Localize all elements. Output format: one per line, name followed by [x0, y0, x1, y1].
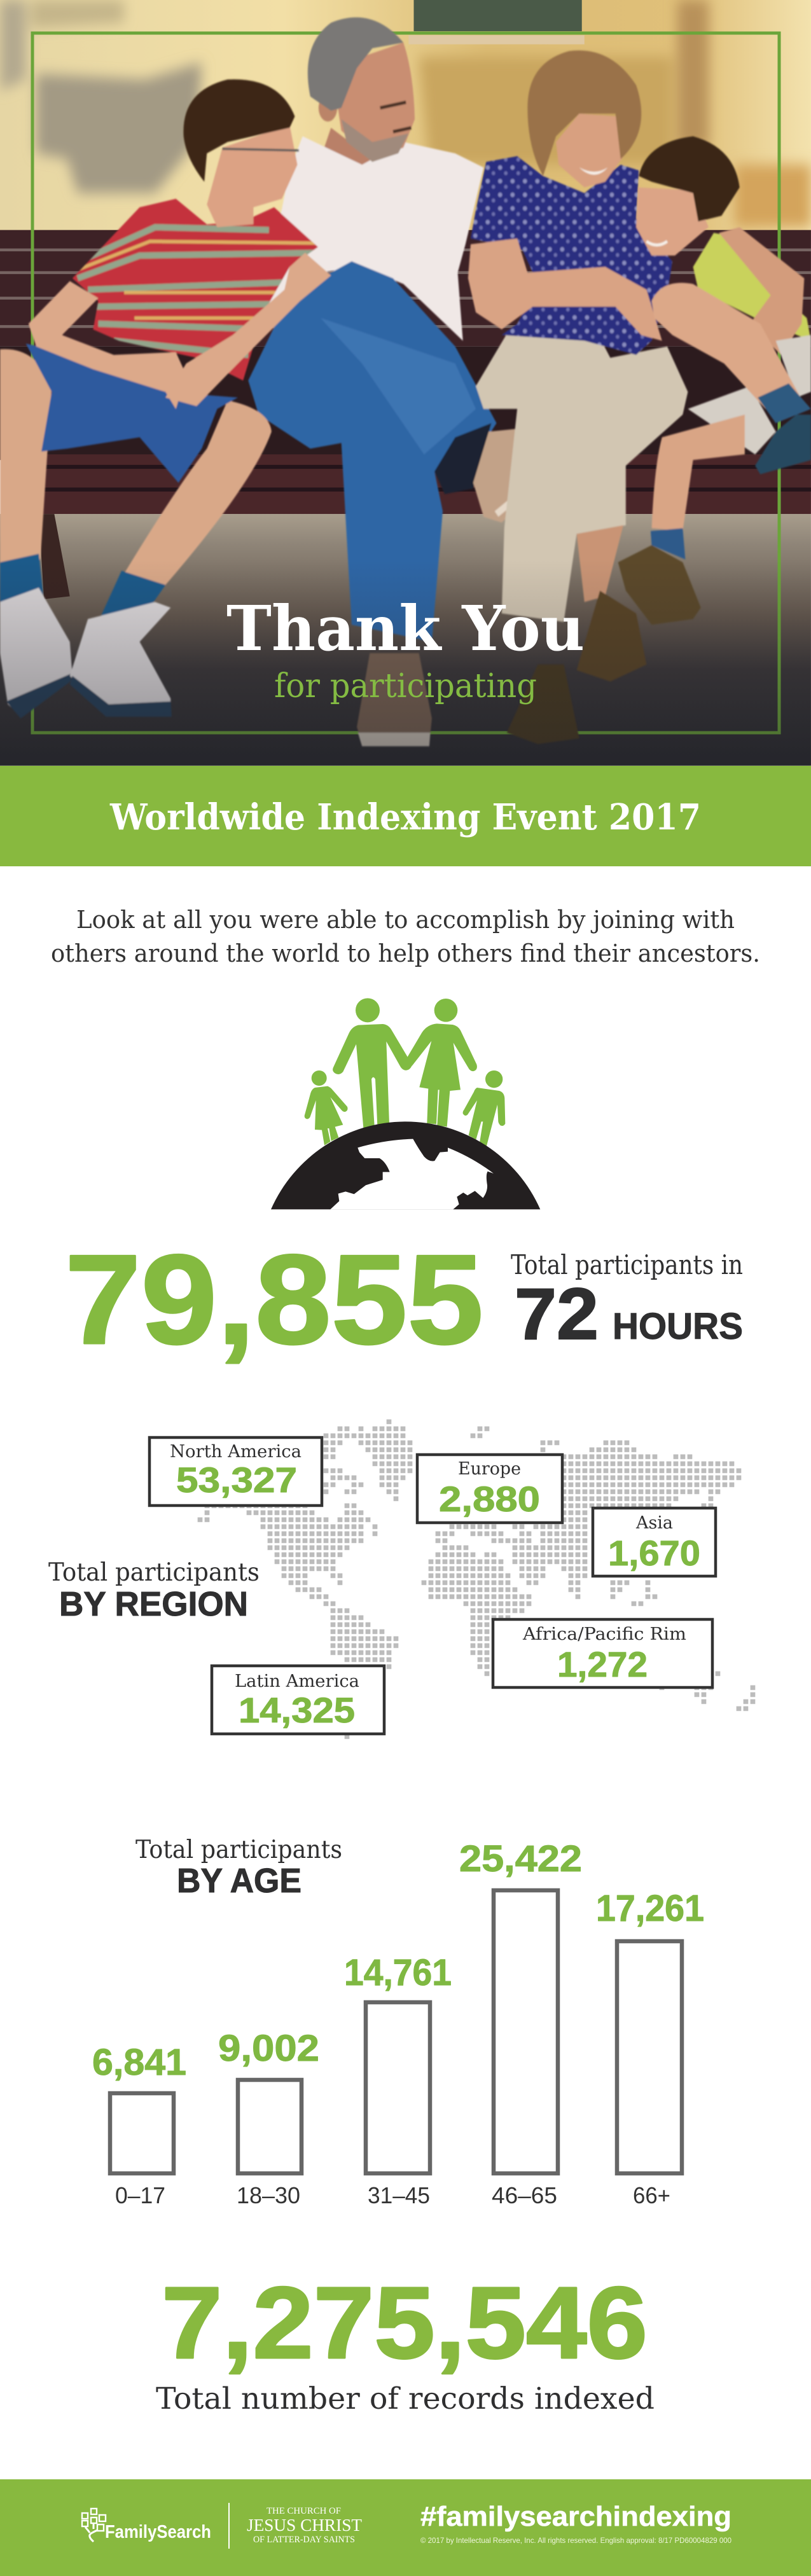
logo: The Church of Jesus Christ of Latter-day Saints: THE CHURCH OF: [267, 2506, 341, 2516]
person: man: [248, 17, 569, 746]
callout: Latin America: Latin America: [235, 1672, 359, 1691]
callout: Europe: Europe: [458, 1459, 521, 1479]
logo: FamilySearch: FamilySearch: [105, 2522, 211, 2542]
label: 72 hours: HOURS: [613, 1306, 743, 1347]
divider: [228, 2503, 230, 2549]
panel: participants by region: [48, 1418, 756, 1740]
stat: total records indexed: [156, 2266, 655, 2416]
photo shade overlay: [0, 581, 811, 766]
bar chart: participants by age: 14,761: [344, 1952, 452, 1993]
stat: total participants in 72 hours: [65, 1229, 743, 1371]
callout: North America: 53,327: [176, 1460, 297, 1500]
number: 79,855: 79,855: [65, 1229, 483, 1371]
heading: total participants by region: [48, 1558, 260, 1623]
icon: family standing on globe: [271, 998, 540, 1209]
bar chart: participants by age: 0–17: [115, 2182, 165, 2208]
copyright: © 2017 by Intellectual Reserve, Inc. All rights reserved. English approval: 8/17 PD60004829 000: [420, 2536, 731, 2545]
callout: Africa/Pacific Rim: 1,272: [557, 1644, 648, 1684]
hashtag: #familysearchindexing: [420, 2501, 731, 2532]
dotted world map: [197, 1418, 756, 1740]
label: total participants in: Total participants in: [511, 1249, 743, 1280]
panel: participants by age: [92, 1836, 704, 2208]
photo background: wall, bench and pavement: [0, 0, 811, 766]
logo: The Church of Jesus Christ of Latter-day Saints: [247, 2506, 363, 2545]
panel: hero photo: [0, 0, 811, 766]
heading: total participants by region: Total participants: [48, 1558, 260, 1587]
callout: North America: [149, 1437, 322, 1506]
person: boy with striped shirt: [0, 80, 331, 719]
callout: Latin America: [212, 1666, 384, 1734]
callout: Asia: [593, 1508, 716, 1576]
label: 72 hours: [515, 1274, 743, 1355]
person: woman: [468, 50, 688, 744]
bar chart: participants by age: 6,841: [92, 2042, 186, 2083]
stat: total records indexed: 7,275,546: [162, 2266, 648, 2379]
heading: total participants by age: BY AGE: [177, 1862, 302, 1900]
label: total number of records indexed: Total number of records indexed: [156, 2381, 655, 2416]
photo frame: green outline: [32, 33, 779, 733]
callout: Europe: 2,880: [439, 1479, 540, 1519]
callout: Asia: Asia: [635, 1513, 673, 1533]
logo: The Church of Jesus Christ of Latter-day Saints: OF LATTER-DAY SAINTS: [253, 2535, 355, 2545]
panel: footer: [0, 2479, 811, 2576]
bar chart: participants by age: 66+: [633, 2182, 670, 2208]
bar chart: participants by age: 25,422: [459, 1838, 582, 1880]
heading: event name: Worldwide Indexing Event 2017: [109, 796, 701, 838]
person: smiling boy: [618, 136, 811, 625]
bar chart: participants by age: 18–30: [237, 2182, 300, 2208]
logo: The Church of Jesus Christ of Latter-day Saints: JESUS CHRIST: [247, 2516, 363, 2535]
bar chart: participants by age: 17,261: [596, 1888, 704, 1929]
subtitle: for participating: for participating: [274, 667, 537, 705]
heading: total participants by region: BY REGION: [59, 1585, 248, 1623]
bar chart: participants by age: 9,002: [218, 2028, 319, 2069]
text block: introduction: [51, 906, 760, 967]
photo: family sitting on bench: [0, 17, 811, 746]
icon: FamilySearch tree: [82, 2509, 106, 2542]
callout: Asia: 1,670: [608, 1533, 700, 1573]
panel: green event banner: [0, 766, 811, 866]
callout: Latin America: 14,325: [239, 1690, 355, 1730]
callout: Africa/Pacific Rim: [493, 1619, 712, 1687]
callout: North America: North America: [170, 1442, 302, 1462]
label: 72 hours: 72: [515, 1274, 599, 1355]
title: Thank You: Thank You: [226, 592, 585, 665]
bar chart: participants by age: 46–65: [492, 2182, 557, 2208]
text block: introduction: Look at all you were able to accomplish by joining with: [76, 906, 735, 934]
bar chart: participants by age: 31–45: [368, 2182, 430, 2208]
callout: Europe: [417, 1455, 562, 1523]
bar chart: participants by age: [92, 1838, 704, 2208]
text block: introduction: others around the world to help others find their ancestors.: [51, 939, 760, 967]
heading: total participants by age: Total participants: [135, 1836, 342, 1864]
callout: Africa/Pacific Rim: Africa/Pacific Rim: [522, 1624, 686, 1644]
heading: total participants by age: [135, 1836, 342, 1900]
